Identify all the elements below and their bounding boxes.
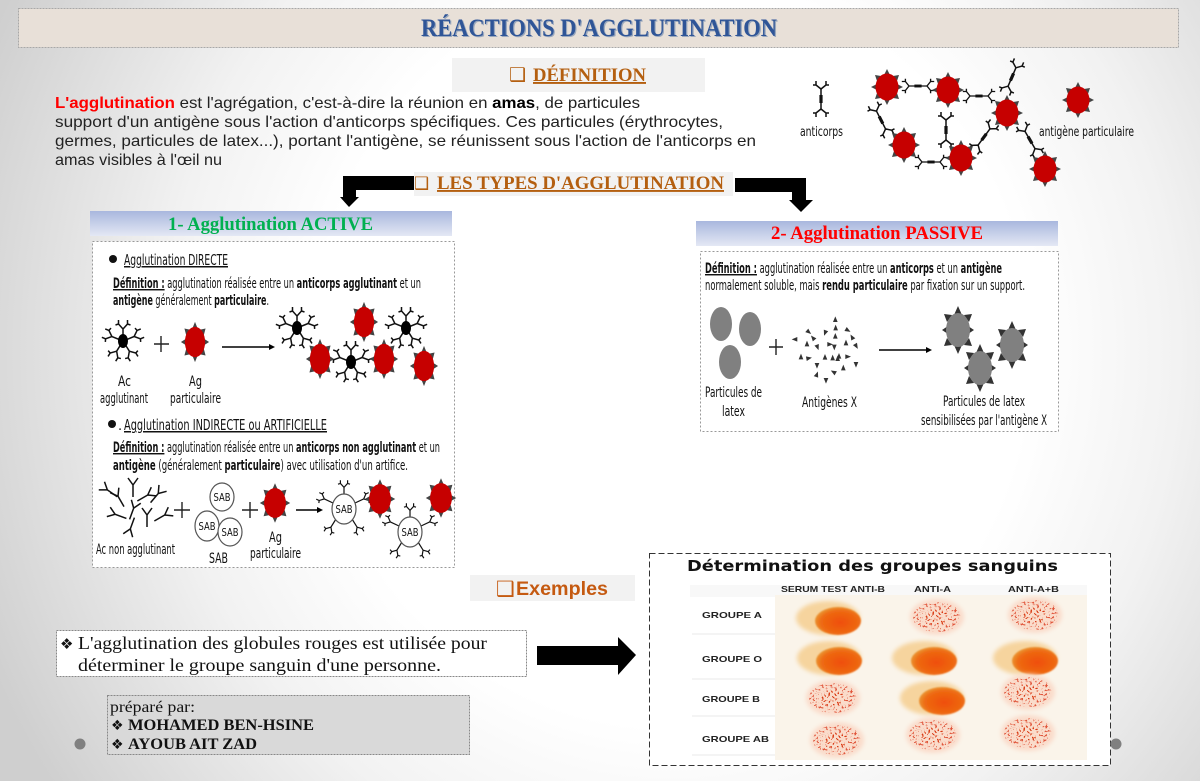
diagram: agglutination indirecte: SAB [214, 491, 230, 504]
panel: détermination des groupes sanguins: Détermination des groupes sanguins [687, 557, 1058, 575]
antigènes x triangles [792, 316, 860, 384]
heading: exemples [470, 575, 635, 601]
heading: définition [452, 58, 705, 92]
blood test table: GROUPE A [702, 610, 762, 620]
definition text block: amas visibles à l'œil nu [55, 152, 222, 169]
passive labels: latex [722, 404, 745, 420]
diagram: agglutination indirecte: SAB [198, 520, 216, 533]
passive labels: Particules de [705, 385, 762, 401]
title banner: RÉACTIONS D'AGGLUTINATION [421, 14, 777, 42]
agglutination indirecte text: . [118, 419, 122, 434]
heading bar: agglutination active [90, 211, 452, 236]
diagram: agglutination indirecte: SAB [209, 551, 228, 567]
decorative dot left [74, 738, 86, 750]
sensitised latex particles [942, 306, 1028, 392]
title banner [18, 8, 1178, 48]
heading: définition: ❑ [509, 64, 526, 86]
credits box: ❖ [111, 737, 124, 753]
heading bar: agglutination passive: 2- Agglutination PASSIVE [771, 224, 983, 244]
blood test table: GROUPE AB [702, 734, 769, 744]
diagram: agglutination directe [100, 302, 438, 407]
title banner: RÉACTIONS D'AGGLUTINATION [422, 15, 778, 43]
diagram: anticorps and antigène network: anticorps [800, 125, 843, 140]
heading: les types d'agglutination: LES TYPES D'AGGLUTINATION [437, 173, 724, 194]
heading bar: agglutination passive [696, 221, 1058, 246]
diagram: agglutination indirecte: SAB [222, 526, 238, 539]
arrow: to passive [735, 178, 813, 212]
passive definition text: normalement soluble, mais rendu particulaire par fixation sur un support. [705, 278, 1025, 294]
diagram: agglutination indirecte [96, 478, 456, 567]
credits box [108, 696, 470, 754]
panel: agglutination active [92, 242, 456, 568]
agglutination indirecte text: Agglutination INDIRECTE ou ARTIFICIELLE [124, 416, 327, 434]
agglutination indirecte text: antigène (généralement particulaire) avec utilisation d'un artifice. [113, 458, 408, 474]
credits box: ❖ [111, 718, 124, 734]
agglutination directe text: Agglutination DIRECTE [124, 251, 228, 269]
agglutination directe text: Définition : agglutination réalisée entre un anticorps agglutinant et un [113, 276, 421, 292]
agglutination indirecte text [108, 416, 440, 474]
heading: exemples: Exemples [516, 579, 608, 600]
arrow: to blood group photo [537, 637, 636, 675]
heading: exemples: ❑ [496, 577, 515, 601]
diagram: anticorps and antigène network: antigène particulaire [1039, 125, 1134, 140]
credits box: AYOUB AIT ZAD [128, 736, 257, 753]
definition text block [55, 95, 756, 169]
blood test table: GROUPE B [702, 694, 760, 704]
agglutination directe text [109, 251, 421, 309]
diagram: anticorps and antigène network [800, 57, 1134, 187]
decorative dot right [1110, 738, 1122, 750]
blood test table: ANTI-A+B [1008, 584, 1059, 594]
arrow: to active [340, 176, 414, 207]
panel: détermination des groupes sanguins [650, 554, 1110, 766]
definition text block: germes, particules de latex...), portant l'antigène, se réunissent sous l'action de l'anticorps en [55, 133, 756, 150]
callout: blood group use [56, 630, 526, 676]
diagram: agglutination directe: Ag [189, 374, 202, 390]
blood test table: GROUPE O [702, 654, 763, 664]
blood test table: ANTI-A [914, 584, 951, 594]
diagram: agglutination indirecte: particulaire [250, 546, 301, 562]
diagram: agglutination directe: agglutinant [100, 391, 148, 407]
heading: les types d'agglutination: ❑ [414, 174, 429, 194]
passive labels: Particules de latex [943, 394, 1025, 410]
passive labels: sensibilisées par l'antigène X [921, 413, 1047, 429]
passive labels [705, 385, 1047, 429]
diagram: agglutination directe: particulaire [170, 391, 221, 407]
agglutination spots [796, 597, 1062, 758]
heading bar: agglutination active: 1- Agglutination ACTIVE [168, 215, 373, 235]
diagram: agglutination indirecte: Ac non agglutinant [96, 542, 175, 558]
diagram: agglutination indirecte: SAB [402, 526, 418, 539]
icon: anticorps [813, 81, 829, 117]
callout: blood group use: L'agglutination des globules rouges est utilisée pour [78, 633, 487, 653]
passive labels: Antigènes X [802, 395, 857, 411]
passive definition text: Définition : agglutination réalisée entre un anticorps et un antigène [705, 261, 1002, 277]
passive definition text [705, 261, 1025, 294]
callout: blood group use: ❖ [60, 635, 73, 653]
agglutination directe text: antigène généralement particulaire. [113, 293, 269, 309]
panel: agglutination passive [700, 252, 1058, 432]
credits box: MOHAMED BEN-HSINE [128, 717, 314, 734]
diagram: agglutination indirecte: SAB [336, 503, 352, 516]
definition text block: support d'un antigène sous l'action d'anticorps spécifiques. Ces particules (érythrocytes, [55, 114, 723, 131]
credits box: préparé par: [110, 699, 195, 716]
latex particles [710, 307, 761, 379]
definition text block: L'agglutination est l'agrégation, c'est-à-dire la réunion en amas, de particules [55, 95, 640, 112]
diagram: agglutination directe: Ac [118, 374, 131, 390]
blood test table [690, 584, 1087, 760]
heading: définition: DÉFINITION [533, 64, 646, 86]
blood test table: SERUM TEST ANTI-B [781, 584, 885, 594]
agglutination indirecte text: Définition : agglutination réalisée entre un anticorps non agglutinant et un [113, 440, 440, 456]
diagram: agglutination indirecte: Ag [269, 530, 282, 546]
callout: blood group use: déterminer le groupe sanguin d'une personne. [78, 655, 441, 675]
